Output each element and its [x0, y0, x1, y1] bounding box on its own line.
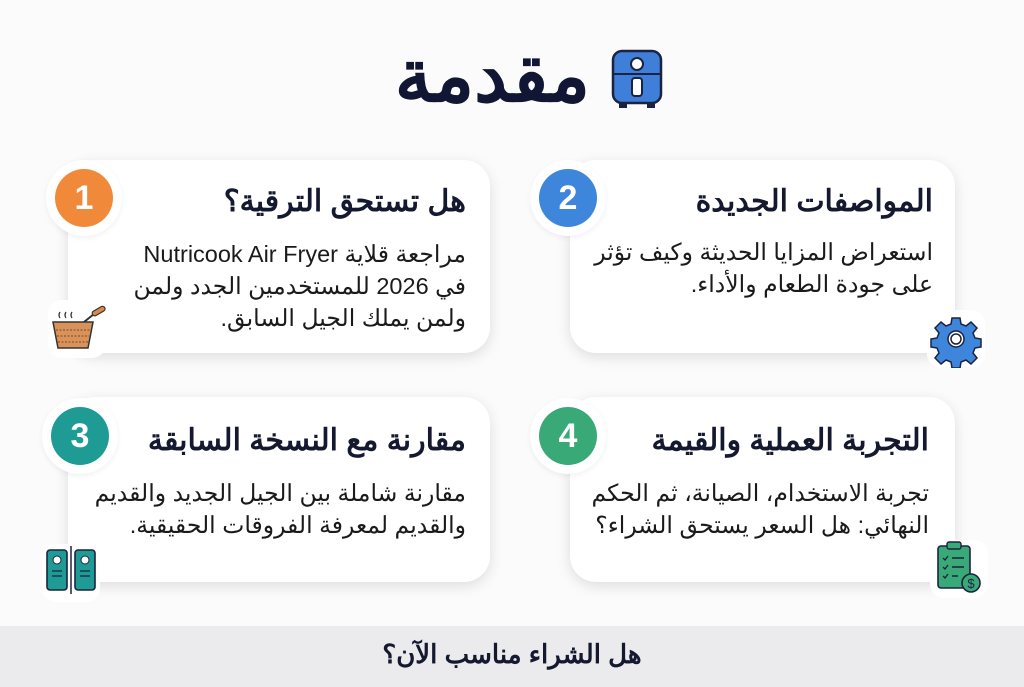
- text 2: على جودة الطعام والأداء.: [691, 271, 933, 297]
- badge 4: 4: [559, 417, 577, 455]
- text 1: ولمن يملك الجيل السابق.: [220, 305, 466, 331]
- title text: مقدمة: [395, 34, 590, 117]
- text 4: تجربة الاستخدام، الصيانة، ثم الحكم: [591, 480, 929, 506]
- heading 2: المواصفات الجديدة: [696, 185, 933, 218]
- text 1: في 2026 للمستخدمين الجدد ولمن: [133, 273, 466, 299]
- panel 1: upgrade: [68, 160, 490, 353]
- icon: clipboard with dollar: $: [967, 576, 975, 591]
- footer band: [0, 626, 1024, 687]
- badge 1: 1: [75, 179, 93, 217]
- footer text: هل الشراء مناسب الآن؟: [382, 639, 642, 669]
- icon: air fryer: [612, 50, 662, 108]
- text 2: [593, 239, 933, 298]
- badge 2: 2: [559, 179, 577, 217]
- panel 2: new features: [570, 160, 955, 353]
- badge 2: [530, 160, 606, 236]
- title: [395, 34, 662, 117]
- text 1: [133, 241, 466, 332]
- icon: comparison devices: [42, 544, 100, 602]
- icon: clipboard with dollar: [930, 540, 988, 598]
- text 4: النهائي: هل السعر يستحق الشراء؟: [595, 512, 929, 538]
- icon: gear: [927, 310, 985, 368]
- badge 4: [530, 398, 606, 474]
- text 2: استعراض المزايا الحديثة وكيف تؤثر: [594, 239, 933, 265]
- text 3: مقارنة شاملة بين الجيل الجديد والقديم: [95, 480, 466, 506]
- heading 4: التجربة العملية والقيمة: [651, 424, 929, 457]
- text 3: [95, 480, 466, 539]
- heading 1: هل تستحق الترقية؟: [224, 185, 466, 218]
- badge 3: 3: [71, 417, 89, 455]
- text 4: [591, 480, 929, 539]
- panel 4: practical experience: [570, 397, 955, 582]
- panel 3: comparison: [68, 397, 490, 582]
- badge 3: [42, 398, 118, 474]
- icon: basket: [48, 300, 106, 358]
- text 1: مراجعة قلاية Nutricook Air Fryer: [143, 241, 466, 267]
- heading 3: مقارنة مع النسخة السابقة: [148, 424, 466, 457]
- text 3: والقديم لمعرفة الفروقات الحقيقية.: [130, 512, 466, 538]
- badge 1: [46, 160, 122, 236]
